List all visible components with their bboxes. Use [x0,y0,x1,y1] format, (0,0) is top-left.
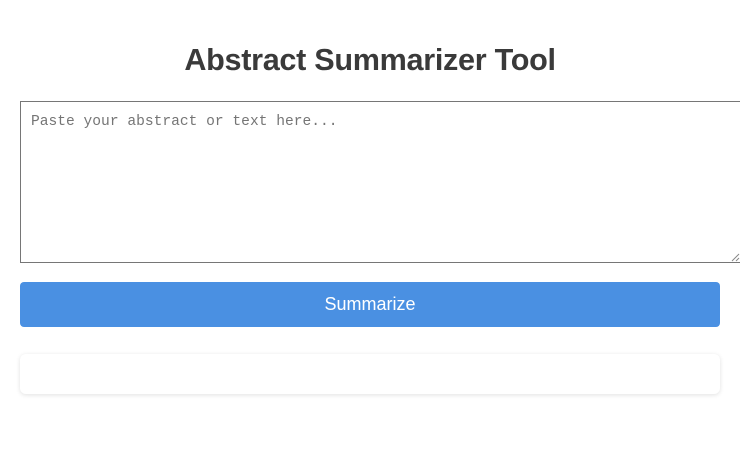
placeholder text: Paste your abstract or text here... [31,114,338,130]
title: Abstract Summarizer Tool [184,43,556,77]
text input area [20,101,740,263]
summarize button [20,282,720,327]
resize grip [732,254,740,262]
result panel [20,354,720,394]
summarize button: Summarize [324,294,416,314]
